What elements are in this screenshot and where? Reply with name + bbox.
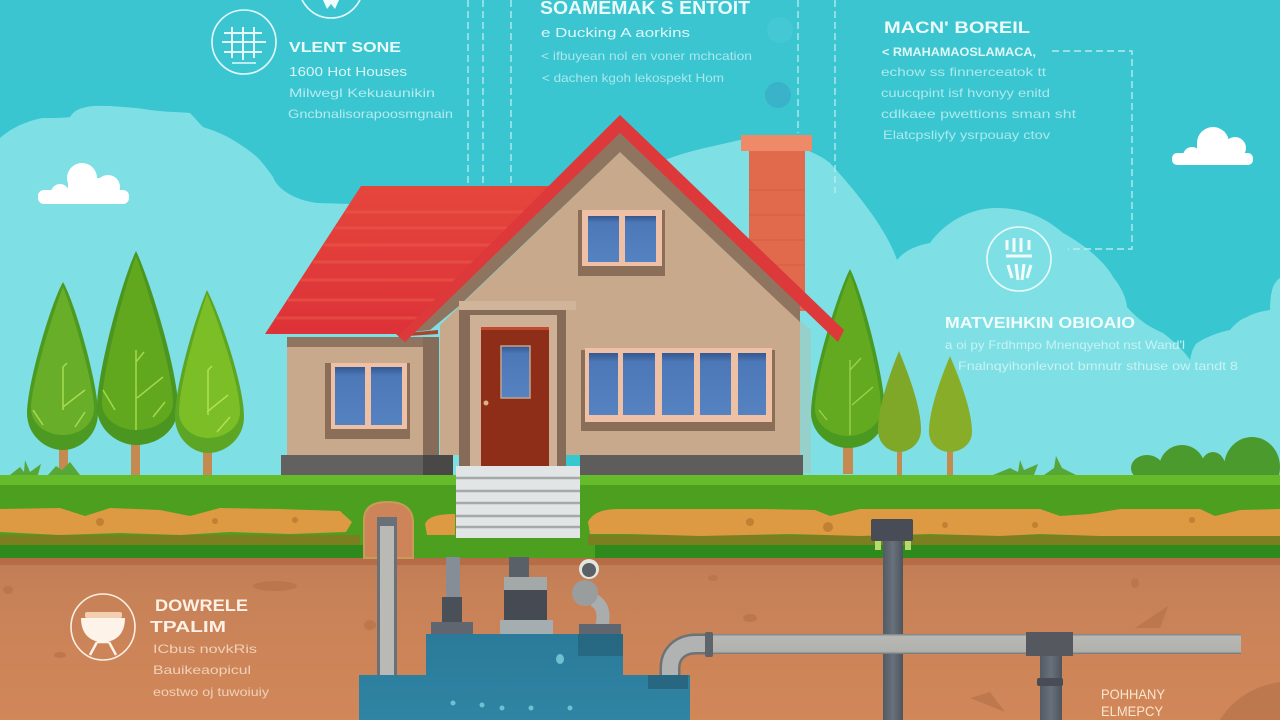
subheading: 1600 Hot Houses: [289, 64, 408, 79]
callout: bottom right: ELMEPCY: [1101, 703, 1164, 719]
body text: [541, 49, 752, 85]
gable roof: [398, 115, 844, 342]
body text: < dachen kgoh lekospekt Hom: [542, 71, 724, 85]
body text: Milwegl Kekuaunikin: [289, 86, 435, 100]
heading: MATVEIHKIN OBIOAIO: [945, 315, 1135, 332]
callout: bottom left: TPALIM: [150, 619, 226, 636]
body text: cdlkaee pwettions sman sht: [881, 107, 1077, 121]
tree 4: [811, 269, 885, 474]
callout: top right: [881, 18, 1077, 142]
gable shadow: [413, 133, 800, 332]
callout: bottom left: [71, 594, 269, 699]
tree 1: [27, 282, 98, 476]
body text: Bauikeaopicul: [153, 663, 251, 677]
body text: cuucqpint isf hvonyy enitd: [881, 86, 1050, 100]
soil layer: [0, 508, 1280, 536]
heading: DOWRELE: [155, 596, 248, 615]
left riser: [431, 557, 473, 634]
small cloud left: [38, 163, 129, 204]
icon: top badge cropped: [299, 0, 363, 18]
body text: eostwo oj tuwoiuiy: [153, 685, 269, 699]
subheading: e Ducking A aorkins: [541, 25, 691, 40]
small cloud right: [1172, 127, 1253, 165]
callout: middle right: [945, 227, 1238, 373]
entry surround: [459, 301, 576, 466]
pipe: horizontal outlet with elbow: [670, 632, 1241, 675]
decorative bubbles: [765, 17, 793, 108]
center pump: [500, 557, 553, 634]
foundation: [281, 455, 803, 475]
bubbles: [450, 654, 572, 710]
stairs: [456, 466, 580, 538]
icon: right badge: [987, 227, 1051, 291]
door knob: [484, 400, 488, 406]
underground dirt: [0, 557, 1280, 720]
tree group left: [10, 251, 244, 476]
body text: ICbus novkRis: [153, 642, 257, 656]
body text: Fnalnqyihonlevnot bmnutr sthuse ow tandt 8: [958, 359, 1238, 373]
septic tank: [359, 557, 690, 720]
subheading: < RMAHAMAOSLAMACA,: [882, 45, 1036, 59]
wing corner shadow: [423, 337, 439, 455]
left wing eave shadow: [287, 337, 424, 347]
grass band: [0, 475, 1280, 558]
dirt specks: [3, 575, 1280, 720]
darker right chamber: [578, 634, 623, 656]
door: [481, 327, 549, 466]
house: [265, 115, 844, 475]
callout: top center: [540, 0, 752, 85]
tree 3: [175, 290, 244, 475]
grass tufts left: [10, 460, 80, 475]
bushes right: [993, 437, 1280, 497]
body text: < ifbuyean nol en voner mchcation: [541, 49, 752, 63]
body text: [153, 642, 269, 699]
elbow outlet stain: [648, 675, 688, 689]
upper window: [578, 210, 665, 276]
left roof: [265, 186, 552, 340]
body text: Gncbnalisorapoosmgnain: [288, 107, 453, 121]
right edge wall strip: [800, 320, 811, 473]
body text: Elatcpsliyfy ysrpouay ctov: [883, 128, 1050, 142]
callout: bottom right: POHHANY: [1101, 686, 1166, 702]
heading: VLENT SONE: [289, 39, 401, 56]
dirt top strip: [0, 557, 1280, 565]
pipe: T fitting: [1026, 632, 1073, 720]
pipe: vertical gray: [871, 519, 913, 720]
dashed connector lines: [468, 0, 1132, 249]
door window: [501, 346, 530, 398]
body text: [945, 338, 1238, 373]
tree 2: [97, 251, 178, 475]
tank body: [359, 634, 690, 720]
pipe: left vent: [364, 502, 413, 675]
body text: [881, 65, 1077, 142]
left background cloud: [0, 106, 560, 480]
icon: grid badge: [212, 10, 276, 74]
right background cloud: [640, 139, 1280, 480]
callout: bottom right: [1101, 686, 1166, 719]
tree 6: [929, 356, 972, 475]
lower right window: [581, 348, 775, 431]
body text: echow ss finnerceatok tt: [881, 65, 1047, 79]
main wall: [440, 152, 800, 455]
lower left window: [325, 363, 410, 439]
body text: [288, 86, 453, 121]
heading: MACN' BOREIL: [884, 18, 1030, 37]
tree group right: [811, 269, 972, 475]
tree 5: [878, 351, 921, 475]
chimney: [741, 135, 812, 311]
left wing wall: [287, 337, 439, 455]
right riser with valve: [572, 559, 621, 634]
icon: grill: [71, 594, 135, 660]
body text: a oi py Frdhmpo Mnenqyehot nst Wand'l: [945, 338, 1185, 352]
callout: top left: [212, 10, 453, 121]
